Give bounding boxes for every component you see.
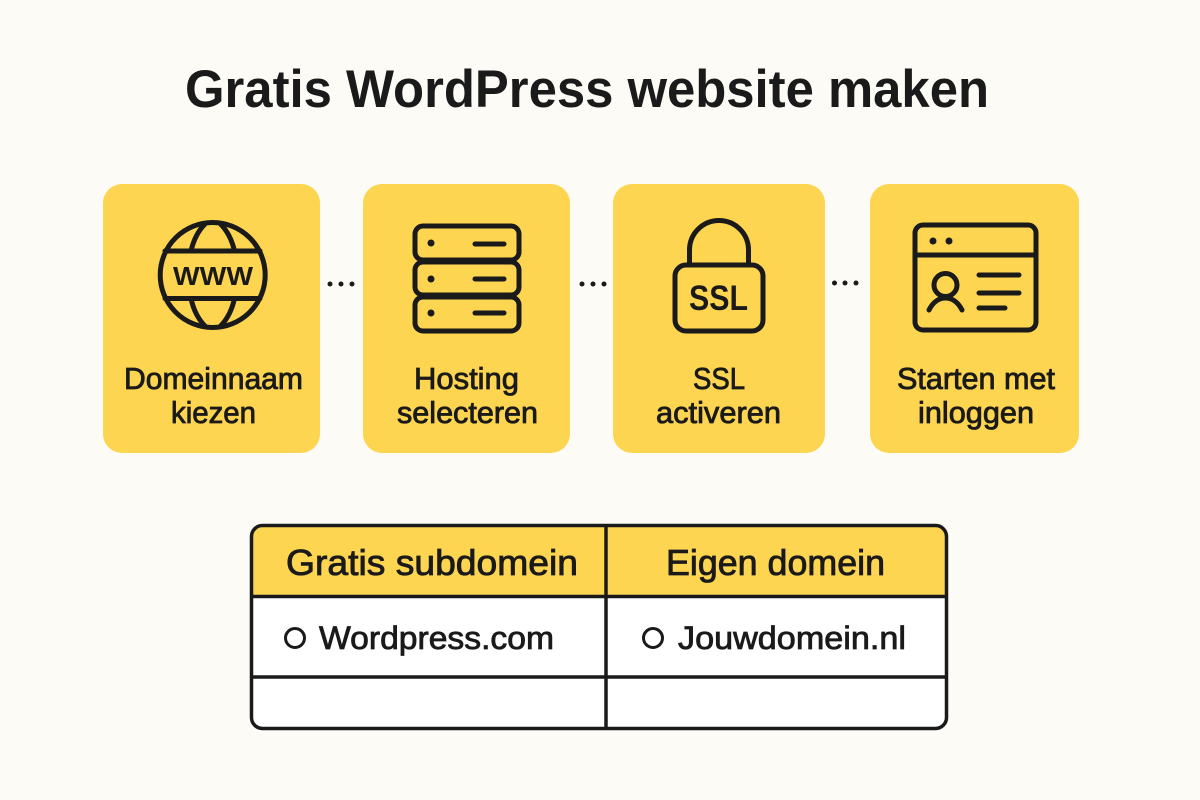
label: Hosting: [414, 361, 519, 396]
cell: jouwdomein.nl: Jouwdomein.nl: [678, 620, 906, 656]
title: Gratis WordPress website maken: [185, 60, 989, 119]
label: Starten met: [897, 361, 1055, 396]
panel: step 2 hosting selecteren: [363, 184, 570, 453]
label: activeren: [656, 395, 781, 430]
icon: www globe: [160, 222, 265, 328]
header: gratis subdomein: Gratis subdomein: [286, 542, 578, 583]
label: SSL: [693, 361, 745, 396]
connector dots 1: [328, 282, 354, 286]
panel: step 4 starten met inloggen: [870, 184, 1079, 453]
panel: step 3 ssl activeren: [613, 184, 825, 453]
connector dots 3: [832, 280, 858, 286]
label: kiezen: [171, 395, 256, 430]
label: [656, 361, 781, 430]
icon: ssl padlock: [675, 220, 763, 331]
connector dots 2: [580, 282, 606, 286]
icon: www globe: WWW: [173, 261, 253, 291]
label: [397, 361, 538, 430]
comparison table: [252, 526, 946, 728]
panel: step 1 domeinnaam kiezen: [103, 184, 320, 453]
label: inloggen: [918, 395, 1034, 430]
cell: wordpress.com: Wordpress.com: [319, 620, 554, 656]
icon: server stack: [415, 226, 519, 331]
header: eigen domein: Eigen domein: [666, 542, 885, 583]
label: selecteren: [397, 395, 538, 430]
icon: browser login window: [915, 225, 1036, 330]
label: Domeinnaam: [124, 361, 303, 396]
label: [897, 361, 1055, 430]
icon: ssl padlock: SSL: [689, 279, 748, 318]
label: [124, 361, 303, 430]
table header band: [252, 526, 946, 596]
